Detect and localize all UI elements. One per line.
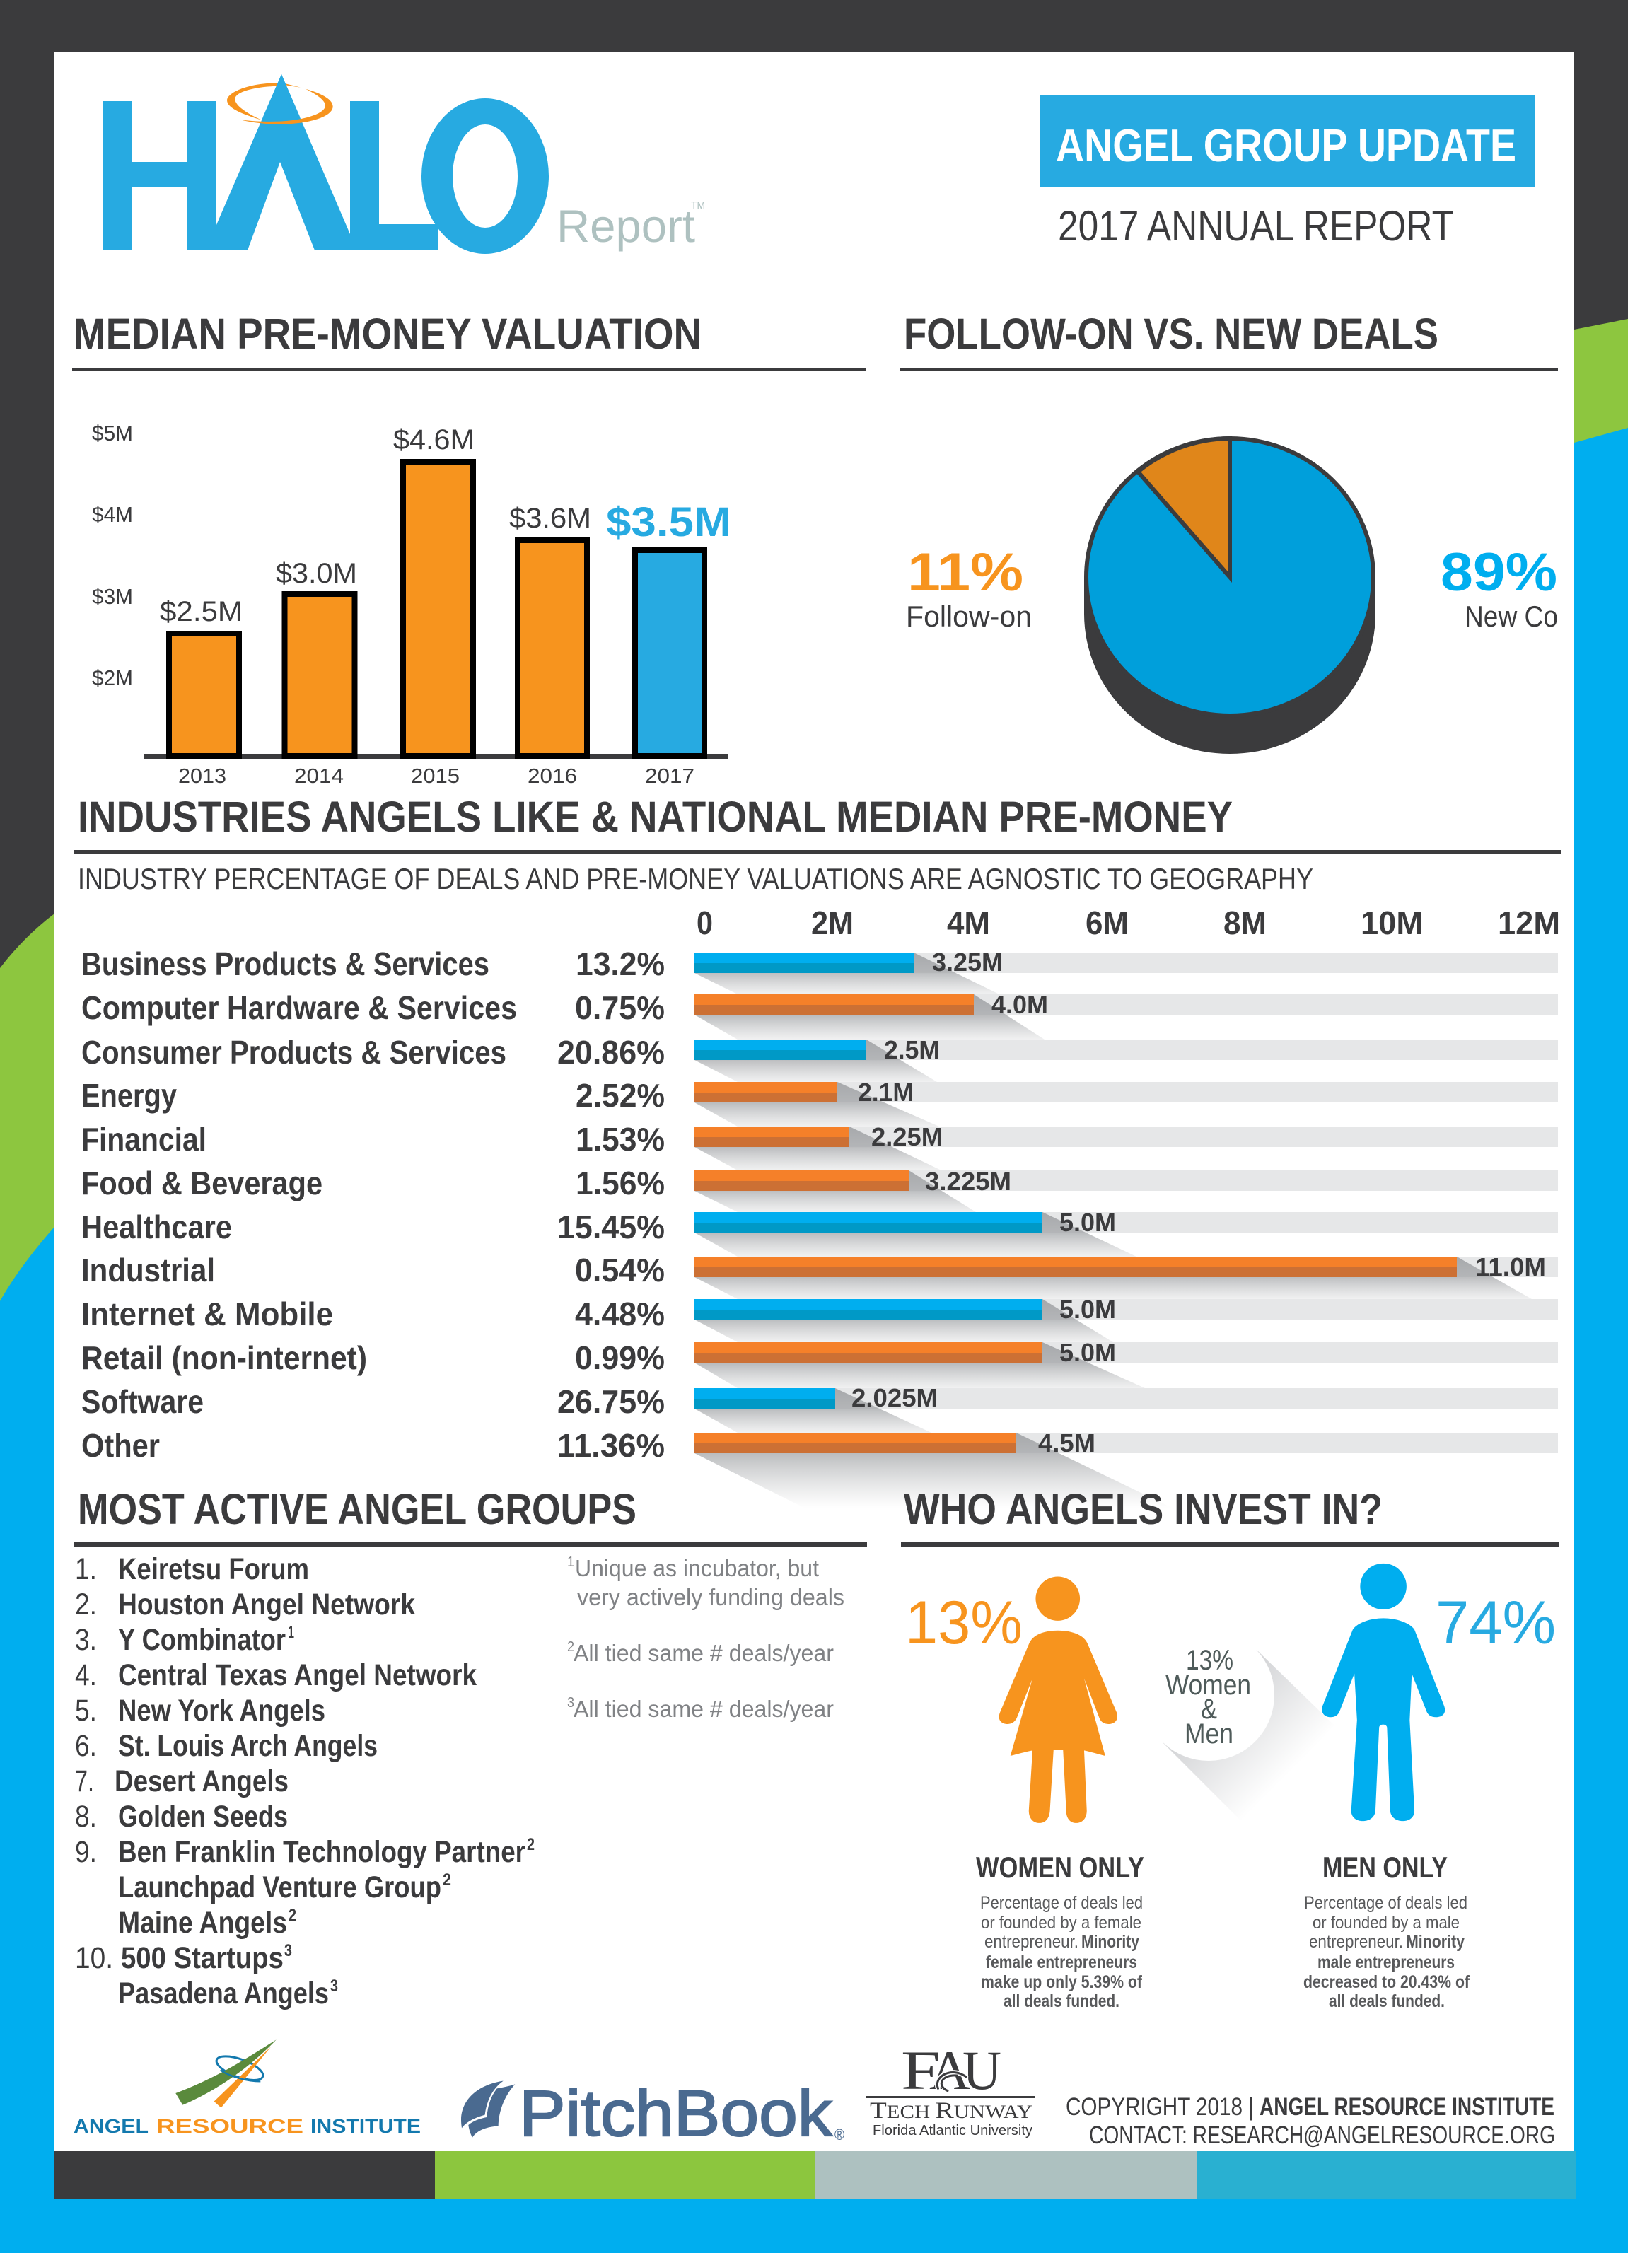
horizontal bar chart: 5.0M (1059, 1208, 1116, 1237)
footer colour strip (54, 2151, 1576, 2199)
bar chart: $4.6M (393, 424, 475, 455)
ranked list: Golden Seeds (118, 1800, 288, 1834)
copyright and contact (1066, 2093, 1555, 2149)
ranked list: 9. (75, 1835, 97, 1869)
footnotes: All tied same # deals/year (574, 1640, 834, 1666)
callout: 11% follow-on: 11% (907, 542, 1023, 602)
ranked list: St. Louis Arch Angels (118, 1729, 378, 1763)
ranked list: 2 (527, 1835, 535, 1854)
ranked list: Launchpad Venture Group (118, 1870, 441, 1904)
text block: men only: Minority (1406, 1932, 1465, 1952)
footnotes: 2 (567, 1639, 574, 1655)
industry names: Consumer Products & Services (81, 1034, 506, 1071)
ranked list (75, 1552, 535, 2010)
text block: women only: female entrepreneurs (986, 1952, 1137, 1972)
panel: most active angel groups (74, 1485, 867, 2010)
callout: 13% women and men (1143, 1629, 1334, 1822)
bar chart (92, 421, 731, 788)
title badge: Angel Group Update: ANGEL GROUP UPDATE (1056, 120, 1516, 171)
callout: 11% follow-on: Follow-on (906, 600, 1032, 633)
logo: FAU Tech Runway (866, 2039, 1035, 2138)
bar chart: $2M (92, 665, 133, 690)
bar chart: $3M (92, 584, 133, 609)
stat: men 74%: 74% (1436, 1589, 1556, 1657)
axis labels: 6M (1086, 904, 1129, 941)
industry percentages: 2.52% (576, 1077, 665, 1114)
industry percentages: 0.54% (575, 1252, 665, 1288)
ranked list: Houston Angel Network (118, 1588, 415, 1622)
industry percentages: 0.99% (575, 1339, 665, 1376)
industry names: Internet & Mobile (81, 1296, 333, 1332)
axis labels: 10M (1361, 904, 1423, 941)
industry names (81, 945, 517, 1464)
callout: 13% women and men: Women (1165, 1670, 1251, 1701)
ranked list: 10. (75, 1941, 113, 1975)
ranked list: Desert Angels (115, 1764, 289, 1798)
panel: median pre-money valuation (72, 310, 866, 788)
industry names: Food & Beverage (81, 1165, 322, 1201)
bar chart: 2017 (645, 765, 694, 788)
text block: men only: or founded by a male (1313, 1913, 1460, 1933)
logo: FAU Tech Runway: F (901, 2039, 941, 2101)
text block: women only: Percentage of deals led (980, 1893, 1143, 1913)
ranked list: 500 Startups (121, 1941, 284, 1975)
stat: women 13%: 13% (905, 1589, 1023, 1657)
industry percentages: 15.45% (557, 1209, 665, 1245)
industry percentages (557, 945, 665, 1464)
horizontal bar chart: 3.25M (932, 948, 1003, 977)
industry names: Software (81, 1383, 204, 1420)
logo: PitchBook: ® (834, 2126, 844, 2143)
copyright and contact: COPYRIGHT 2018 | (1066, 2093, 1254, 2121)
industry percentages: 26.75% (557, 1383, 665, 1420)
copyright and contact: CONTACT: RESEARCH@ANGELRESOURCE.ORG (1089, 2121, 1555, 2149)
industry percentages: 0.75% (575, 989, 665, 1026)
industry percentages: 1.53% (576, 1121, 665, 1158)
ranked list: New York Angels (118, 1694, 325, 1728)
bar chart: 2015 (411, 765, 460, 788)
ranked list: 5. (75, 1694, 97, 1728)
industry names: Healthcare (81, 1209, 232, 1245)
bar chart: $3.6M (509, 503, 591, 534)
industry names: Retail (non-internet) (81, 1339, 367, 1376)
callout: 89% new co: 89% (1441, 542, 1557, 602)
bar chart: $5M (92, 421, 133, 446)
title badge: Angel Group Update (1040, 95, 1535, 187)
callout: 11% follow-on (906, 542, 1032, 633)
footnotes: very actively funding deals (577, 1584, 844, 1610)
bar chart: 2014 (294, 765, 344, 788)
heading: industries: INDUSTRIES ANGELS LIKE & NATIONAL MEDIAN PRE-MONEY (78, 793, 1233, 841)
ranked list: 8. (75, 1800, 97, 1834)
ranked list: 2. (75, 1588, 97, 1622)
bar chart: 2016 (528, 765, 577, 788)
text block: women only: or founded by a female (981, 1913, 1141, 1933)
ranked list: 7. (75, 1764, 94, 1798)
copyright and contact: ANGEL RESOURCE INSTITUTE (1260, 2093, 1554, 2121)
bar chart: $3.5M (606, 499, 731, 545)
ranked list: 2 (289, 1906, 296, 1925)
ranked list: 4. (75, 1658, 97, 1692)
text block: men only: entrepreneur. (1309, 1932, 1403, 1952)
ranked list: 3. (75, 1623, 97, 1657)
industry percentages: 20.86% (557, 1034, 665, 1071)
heading: who angels invest in: WHO ANGELS INVEST IN? (904, 1485, 1383, 1533)
logo: FAU Tech Runway: A (929, 2039, 970, 2101)
heading: who angels invest in (901, 1485, 1559, 1547)
horizontal bar chart: 3.225M (925, 1167, 1011, 1196)
subheading: INDUSTRY PERCENTAGE OF DEALS AND PRE-MONEY VALUATIONS ARE AGNOSTIC TO GEOGRAPHY (78, 862, 1313, 895)
axis labels: 2M (811, 904, 854, 941)
text block: women only: make up only 5.39% of (981, 1972, 1143, 1992)
panel: follow-on vs new deals (900, 310, 1558, 754)
ranked list: Pasadena Angels (118, 1977, 329, 2010)
bar chart: $2.5M (160, 596, 243, 627)
ranked list: 1 (288, 1623, 294, 1642)
bar chart: 2013 (178, 765, 226, 788)
axis labels: 0 (697, 904, 713, 941)
subtitle: 2017 ANNUAL REPORT (1058, 202, 1454, 250)
horizontal bar chart: 2.25M (871, 1122, 943, 1151)
text block: women only: Minority (1081, 1932, 1139, 1952)
text block: men only: all deals funded. (1329, 1991, 1445, 2011)
horizontal bar chart: 5.0M (1059, 1295, 1116, 1324)
logo: FAU Tech Runway: TECH RUNWAY (870, 2098, 1032, 2124)
horizontal bar chart: 11.0M (1475, 1252, 1546, 1281)
horizontal bar chart: 2.1M (858, 1078, 914, 1107)
logo: HALO Report: TM (691, 199, 705, 211)
axis labels: 4M (947, 904, 990, 941)
horizontal bar chart: 4.5M (1038, 1428, 1095, 1457)
text block: women only: WOMEN ONLY (976, 1851, 1144, 1884)
text block: men only: Percentage of deals led (1304, 1893, 1467, 1913)
ranked list: 2 (443, 1870, 451, 1890)
text block: women only: all deals funded. (1004, 1991, 1119, 2011)
footnotes (567, 1554, 844, 1722)
footnotes: 1 (567, 1554, 574, 1570)
footnotes: All tied same # deals/year (574, 1696, 834, 1722)
horizontal bar chart: 2.5M (884, 1035, 940, 1064)
ranked list: Keiretsu Forum (118, 1552, 309, 1586)
callout: 89% new co: New Co (1465, 600, 1558, 633)
icon: man figure (1322, 1564, 1445, 1821)
logo: Angel Resource Institute: ANGEL (74, 2115, 149, 2137)
logo: FAU Tech Runway: U (962, 2039, 1001, 2101)
industry names: Computer Hardware & Services (81, 989, 517, 1026)
ranked list: 1. (75, 1552, 97, 1586)
axis labels: 12M (1498, 904, 1560, 941)
heading: follow-on vs new deals: FOLLOW-ON VS. NEW DEALS (904, 310, 1438, 358)
pie chart (1084, 438, 1375, 754)
horizontal bar chart (694, 948, 1558, 1508)
text block: women only (976, 1851, 1144, 2011)
text block: men only (1303, 1851, 1470, 2011)
ranked list: Maine Angels (118, 1906, 287, 1940)
industry percentages: 1.56% (576, 1165, 665, 1201)
heading: median pre-money valuation: MEDIAN PRE-MONEY VALUATION (74, 310, 702, 358)
text block: women only: entrepreneur. (984, 1932, 1078, 1952)
ranked list: 3 (330, 1977, 338, 1996)
icon: woman figure (999, 1577, 1117, 1823)
industry percentages: 13.2% (576, 945, 665, 982)
footnotes: 3 (567, 1695, 574, 1711)
bar chart: $4M (92, 502, 133, 527)
bar chart: $3.0M (276, 558, 357, 589)
heading: median pre-money valuation (72, 310, 866, 371)
text block: men only: male entrepreneurs (1317, 1952, 1455, 1972)
logo: Angel Resource Institute: INSTITUTE (310, 2115, 421, 2137)
horizontal bar chart: 2.025M (851, 1383, 938, 1412)
logo: PitchBook: PitchBook (519, 2078, 833, 2150)
ranked list: Ben Franklin Technology Partner (118, 1835, 525, 1869)
axis labels: 8M (1223, 904, 1267, 941)
panel: who angels invest in (901, 1485, 1559, 2011)
text block: men only: MEN ONLY (1322, 1851, 1448, 1884)
logo: Angel Resource Institute (74, 2039, 421, 2137)
ranked list: 3 (284, 1941, 292, 1960)
ranked list: Y Combinator (118, 1623, 286, 1657)
heading: most active angel groups (74, 1485, 867, 1547)
callout: 13% women and men: 13% (1186, 1645, 1233, 1676)
logo: FAU Tech Runway: Florida Atlantic University (873, 2123, 1032, 2138)
logo: Angel Resource Institute: RESOURCE (156, 2115, 303, 2137)
text block: men only: decreased to 20.43% of (1303, 1972, 1470, 1992)
horizontal bar chart: 5.0M (1059, 1338, 1116, 1367)
industry names: Financial (81, 1121, 206, 1158)
industry percentages: 11.36% (557, 1427, 665, 1464)
industry names: Industrial (81, 1252, 215, 1288)
ranked list: Central Texas Angel Network (118, 1658, 477, 1692)
callout: 89% new co (1441, 542, 1558, 633)
logo: HALO Report (103, 74, 705, 254)
axis labels (697, 904, 1560, 941)
heading: most active angel groups: MOST ACTIVE ANGEL GROUPS (78, 1485, 636, 1533)
callout: 13% women and men: & (1201, 1694, 1217, 1725)
industry names: Business Products & Services (81, 945, 489, 982)
footnotes: Unique as incubator, but (575, 1555, 819, 1581)
industry names: Other (81, 1427, 160, 1464)
heading: industries (74, 793, 1561, 854)
industry names: Energy (81, 1077, 177, 1114)
panel: industries angels like (74, 793, 1561, 1508)
callout: 13% women and men: Men (1185, 1718, 1233, 1750)
ranked list: 6. (75, 1729, 97, 1763)
industry percentages: 4.48% (575, 1296, 665, 1332)
horizontal bar chart: 4.0M (991, 990, 1048, 1019)
logo: HALO Report: Report (557, 200, 695, 252)
